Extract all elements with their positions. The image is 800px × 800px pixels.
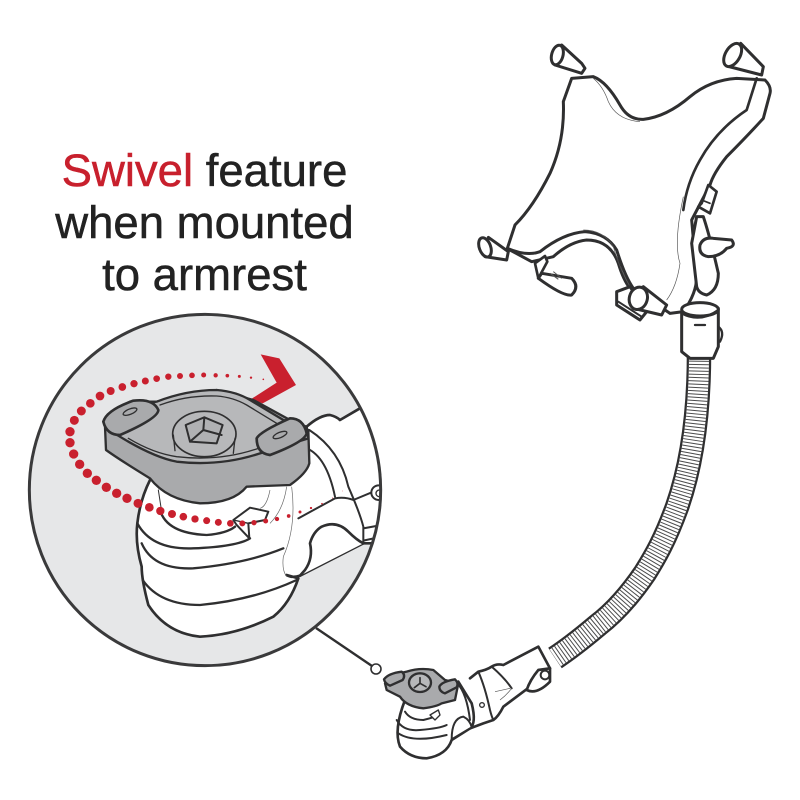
tablet holder cradle xyxy=(476,40,770,358)
armrest and small mount plate xyxy=(384,669,474,758)
cradle finger cones xyxy=(476,40,763,320)
title: when mounted xyxy=(54,197,354,248)
leader line from detail circle to mount xyxy=(316,628,381,674)
detail circle: swivel close-up xyxy=(29,314,387,666)
lower left adjustment knob xyxy=(535,256,576,295)
cradle body xyxy=(507,77,770,313)
title: to armrest xyxy=(102,249,307,300)
mount plate xyxy=(103,390,309,503)
small mount plate xyxy=(385,669,458,708)
red dotted rotation path xyxy=(65,372,343,527)
clamp tube and bolt xyxy=(470,647,550,728)
red swivel arrow xyxy=(251,354,296,403)
title: Swivel feature xyxy=(62,145,347,196)
hose collar xyxy=(682,303,722,358)
clamp bolt xyxy=(527,668,550,691)
flexible gooseneck hose xyxy=(555,354,699,658)
armrest clamp xyxy=(137,408,387,637)
ball arm and knob xyxy=(692,185,733,295)
armrest base xyxy=(398,682,474,758)
